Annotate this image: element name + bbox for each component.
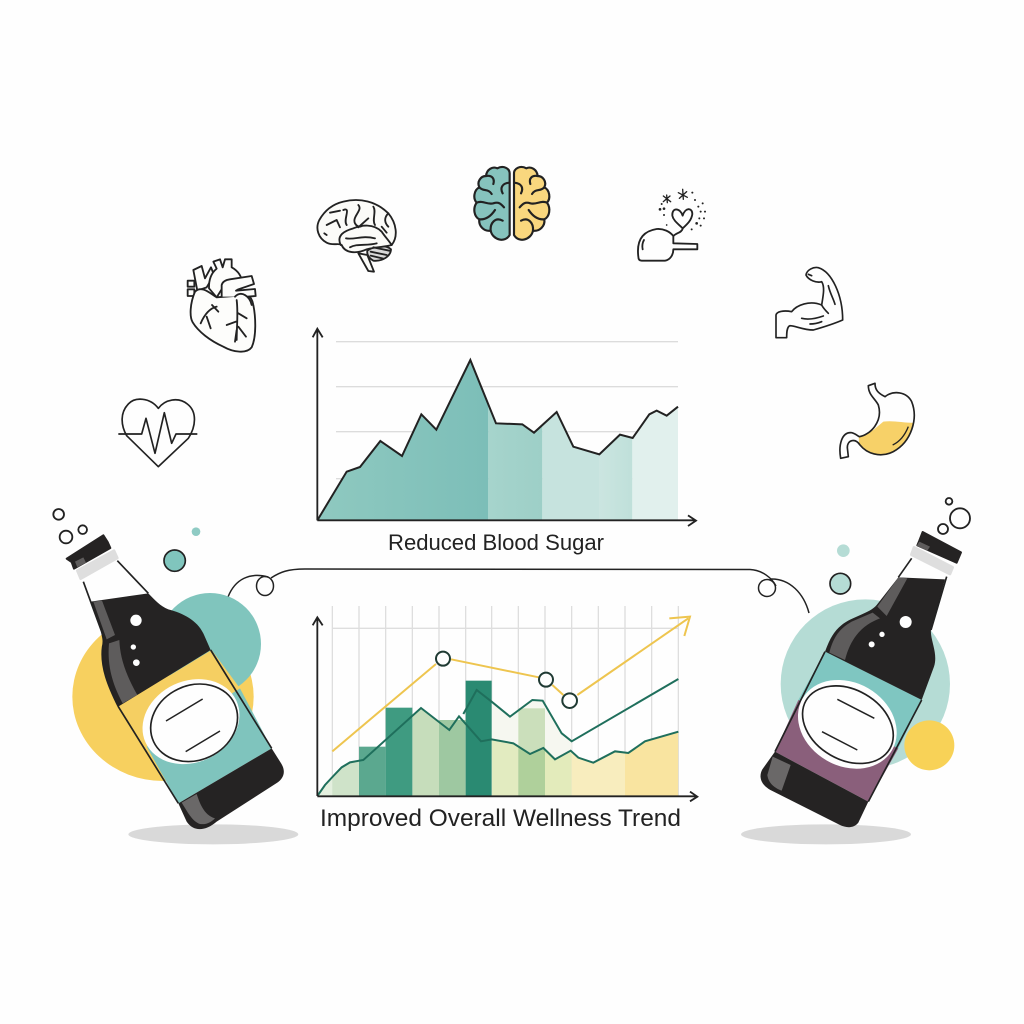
bottle cap [911,532,961,574]
left hemisphere [474,167,510,240]
background circles [72,527,261,781]
icon: flexed arm [776,267,843,338]
icon: stomach [840,383,914,458]
chart: reduced blood sugar [313,329,696,555]
ground shadow [741,824,911,844]
label oval [128,664,253,780]
bubbles [938,498,970,534]
label oval [782,662,913,786]
bottle illustration: right [741,498,970,844]
icon: digestive organ with heart and sparkles [638,189,706,261]
chart title: Improved Overall Wellness Trend [320,805,681,832]
bottle body [83,561,284,829]
icon: anatomical heart [188,259,256,352]
icon: two-colour brain [474,167,549,240]
icon: brain side view [317,200,396,272]
bottle illustration: left [53,509,298,844]
chart title: Reduced Blood Sugar [388,530,604,555]
icon: heart with pulse [118,399,197,467]
chart: improved overall wellness trend [313,606,697,832]
background circles [781,544,954,770]
right hemisphere [514,167,549,240]
ground shadow [128,824,298,844]
connector line between bottles [228,569,809,613]
bubbles [53,509,87,543]
bottle cap [67,535,117,579]
bottle body [761,558,947,827]
